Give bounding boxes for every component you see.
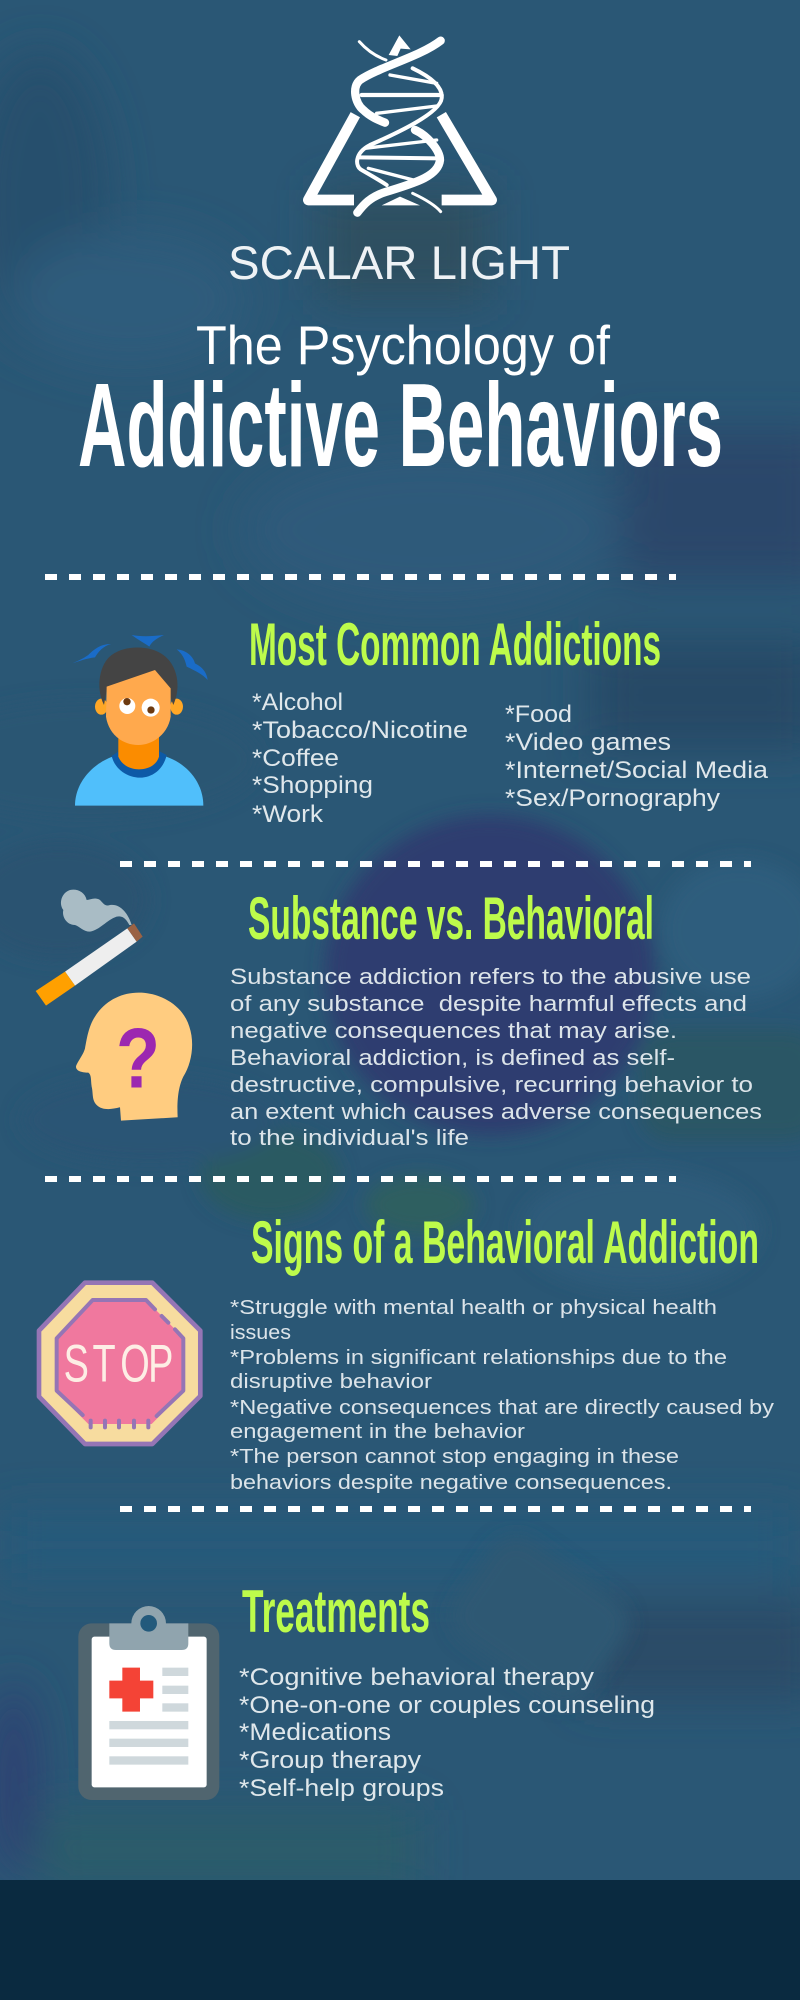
list left: *Shopping xyxy=(252,772,373,799)
paragraph: Substance addiction refers to the abusive use xyxy=(230,964,751,989)
paragraph: an extent which causes adverse consequences xyxy=(230,1099,762,1124)
paragraph: of any substance despite harmful effects and xyxy=(230,991,747,1016)
list of signs: *Negative consequences that are directly caused by xyxy=(230,1396,775,1419)
panel: signs of a behavioral addiction xyxy=(39,1209,775,1494)
list right: *Sex/Pornography xyxy=(505,785,720,812)
list left: *Coffee xyxy=(252,745,339,772)
list of signs: *Problems in significant relationships due to the xyxy=(230,1346,727,1369)
list left: *Tobacco/Nicotine xyxy=(252,717,468,744)
paragraph xyxy=(230,964,762,1150)
list left xyxy=(252,689,468,828)
panel: most common addictions xyxy=(72,611,769,828)
list of signs xyxy=(230,1296,775,1494)
paragraph: Behavioral addiction, is defined as self- xyxy=(230,1045,675,1070)
list of signs: *The person cannot stop engaging in these xyxy=(230,1445,679,1468)
paragraph: negative consequences that may arise. xyxy=(230,1018,677,1043)
icon: medical clipboard xyxy=(78,1606,219,1800)
paragraph: destructive, compulsive, recurring behavior to xyxy=(230,1072,753,1097)
list left: *Alcohol xyxy=(252,689,343,716)
list of treatments: *Medications xyxy=(239,1719,391,1746)
paragraph: to the individual's life xyxy=(230,1125,469,1150)
logo: DNA triangle xyxy=(308,35,492,213)
list of treatments: *One-on-one or couples counseling xyxy=(239,1692,655,1719)
list of treatments xyxy=(239,1664,655,1802)
list of signs: disruptive behavior xyxy=(230,1370,432,1393)
icon: cigarette xyxy=(36,890,143,1006)
icon: head with question mark xyxy=(76,993,192,1121)
list of treatments: *Self-help groups xyxy=(239,1775,444,1802)
list of signs: behaviors despite negative consequences. xyxy=(230,1471,672,1494)
list left: *Work xyxy=(252,801,324,828)
icon: stop sign: STOP xyxy=(64,1333,173,1393)
panel: substance vs behavioral xyxy=(36,885,762,1150)
list of signs: *Struggle with mental health or physical health xyxy=(230,1296,717,1319)
list of treatments: *Cognitive behavioral therapy xyxy=(239,1664,594,1691)
brand name: SCALAR LIGHT xyxy=(228,236,570,289)
icon: stop sign xyxy=(39,1283,200,1444)
list of treatments: *Group therapy xyxy=(239,1747,421,1774)
heading: Treatments xyxy=(242,1578,430,1645)
icon: head with question mark: ? xyxy=(116,1011,160,1106)
list right: *Video games xyxy=(505,729,671,756)
list right: *Internet/Social Media xyxy=(505,757,769,784)
list of signs: issues xyxy=(230,1321,291,1344)
icon: confused person xyxy=(72,635,208,806)
list right xyxy=(505,701,769,812)
list right: *Food xyxy=(505,701,572,728)
panel: treatments xyxy=(78,1578,655,1802)
list of signs: engagement in the behavior xyxy=(230,1420,525,1443)
bottom band xyxy=(0,1880,800,2000)
title line 1: The Psychology of xyxy=(196,314,611,376)
